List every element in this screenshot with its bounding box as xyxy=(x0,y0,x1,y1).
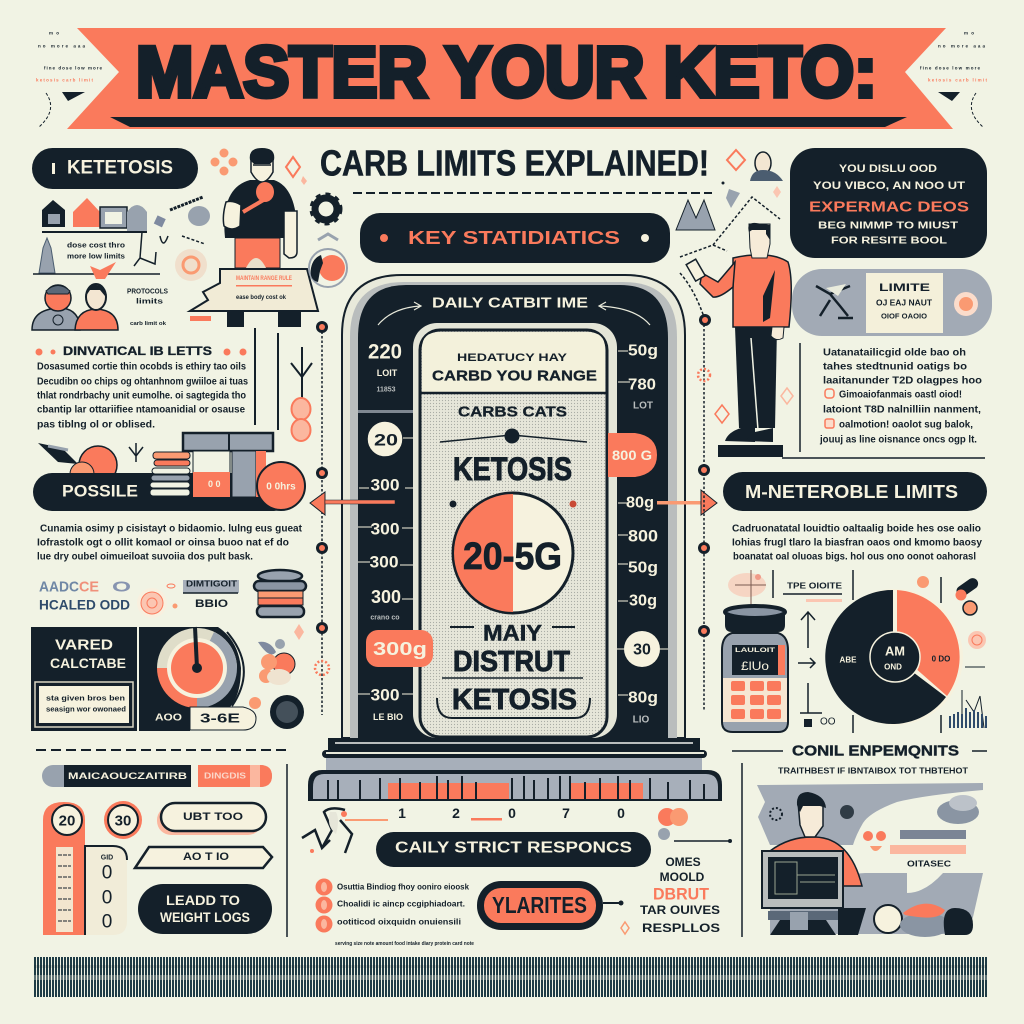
paragraph xyxy=(37,362,248,430)
right scale labels xyxy=(613,342,668,726)
caption beside people: limits xyxy=(136,298,163,306)
icons around pie xyxy=(917,576,986,667)
left scale labels: 300 xyxy=(370,552,398,572)
panel: varied calculator: sta given bros ben xyxy=(46,696,125,702)
ylarites badge: YLARITES xyxy=(492,892,587,918)
icon: coral eight xyxy=(292,398,310,441)
sign board xyxy=(190,269,318,321)
ketetosis heading pill: KETETOSIS xyxy=(67,158,173,178)
banner side notes right: mo xyxy=(964,30,974,36)
right scale labels: 80g xyxy=(626,494,654,512)
coral pill right: 800 G xyxy=(612,447,652,463)
section: contents heading: TRAITHBEST IF IBNTAIBOX TOT THBTEHOT xyxy=(778,766,968,776)
left scale labels: 300 xyxy=(371,587,401,607)
boxes: 0 0 xyxy=(208,479,221,489)
decorative icons xyxy=(770,795,979,851)
paragraph: Decudibn oo chips og ohtanhnom gwiiloe ai tuas xyxy=(37,376,248,388)
possible limits pill with food icons xyxy=(33,433,305,511)
warning text: MAIY xyxy=(483,620,542,646)
scale numbers: 7 xyxy=(562,805,570,821)
arrow left xyxy=(310,492,395,515)
text block right: Gimoaiofanmais oastl oiod! xyxy=(839,390,962,400)
panel: dark callout top right: YOU VIBCO, AN NOO UT xyxy=(813,180,965,192)
paragraph right middle: Cadruonatatal louidtio oaltaalig boide hes ose oalio xyxy=(732,524,981,534)
caption beside people xyxy=(127,288,168,327)
banner side notes left: ketosis carb limit xyxy=(36,78,94,82)
section divider left xyxy=(36,749,290,751)
capsule of zeros: 0 xyxy=(102,862,112,884)
small blurred labels: AADC xyxy=(39,578,79,596)
subtitle: CARB LIMITS EXPLAINED! xyxy=(320,142,709,184)
paragraph: thlat rondrbachy unit eumolhe. oi sagtegida tho xyxy=(37,390,246,402)
small blurred labels: O xyxy=(112,578,132,596)
right scale labels: 50g xyxy=(628,560,658,576)
left scale labels: 20 xyxy=(374,430,398,450)
timeline nodes right xyxy=(698,314,793,637)
left scale labels: 220 xyxy=(368,340,402,364)
text block right: laaitanunder T2D olagpes hoo xyxy=(823,376,982,386)
section: contents heading xyxy=(732,742,987,776)
panel: limits card: LIMITE xyxy=(879,282,930,294)
banner side notes left xyxy=(36,30,102,127)
heading pill: memorable limits: M-NETEROBLE LIMITS xyxy=(745,482,958,502)
scale numbers: 0 xyxy=(508,805,516,821)
arrow label: AO T IO xyxy=(183,851,229,863)
capsule of zeros xyxy=(85,846,127,935)
icons: small objects xyxy=(154,197,210,281)
section: individual limits xyxy=(36,346,248,430)
paragraph right middle: boanatat oal oluoas bigs. hol ous ono oonot oahorasl xyxy=(733,552,976,562)
boxes xyxy=(183,433,273,497)
pill: lead to weight loss xyxy=(138,884,272,934)
icon: supplement jar: £lUo xyxy=(741,659,769,673)
scale numbers: 0 xyxy=(617,805,625,821)
bullet list: Osuttia Bindiog fhoy ooniro eioosk xyxy=(337,882,470,892)
panel: dark callout top right: FOR RESITE BOOL xyxy=(831,236,947,246)
bullet list: ootiticod oixquidn onuiensili xyxy=(337,918,461,926)
right callout text: RESPLLOS xyxy=(642,921,720,935)
mini label: DIMTIGOIT xyxy=(186,580,237,588)
text lines xyxy=(890,830,966,868)
legend: OO xyxy=(820,716,836,728)
daily strict response pill: CAILY STRICT RESPONCS xyxy=(395,840,632,856)
right callout text: MOOLD xyxy=(660,870,705,884)
panel: varied calculator: VARED xyxy=(55,636,113,654)
left scale labels: 300 xyxy=(370,476,400,494)
person xyxy=(770,792,862,886)
possible limits pill with food icons: POSSILE xyxy=(62,482,138,500)
left scale labels: crano co xyxy=(370,614,400,622)
pill: not too xyxy=(157,803,266,835)
left scale labels: 11853 xyxy=(376,386,396,394)
icon: twin dots and divider xyxy=(658,808,732,843)
central scale gauge xyxy=(342,275,685,738)
panel: limits card: OJ EAJ NAUT xyxy=(876,298,932,308)
scale base xyxy=(308,738,722,801)
pill: lead to weight loss: WEIGHT LOGS xyxy=(160,909,250,925)
right scale labels: 780 xyxy=(628,376,656,394)
icon: rosette xyxy=(954,292,978,316)
icon: runner xyxy=(302,808,388,853)
section: contents heading: CONIL ENPEMQNITS xyxy=(792,742,959,760)
banner side notes right: fine dose low more xyxy=(920,66,980,70)
small arrows and legend xyxy=(798,612,822,713)
inner panel: CARBS CATS xyxy=(458,404,567,420)
gauge readout xyxy=(155,707,256,730)
gauge readout: 3-6E xyxy=(200,710,240,726)
icon: stacked container xyxy=(254,570,306,617)
pie chart: 0 DO xyxy=(932,654,950,664)
text block right xyxy=(782,343,985,458)
capsule of zeros: 0 xyxy=(102,888,112,908)
paragraph left middle: Iofrastolk ogt o ollit komaol or oinsa buoo nat ef do xyxy=(37,538,289,548)
icon: coral disc xyxy=(309,234,347,287)
right scale labels: LIO xyxy=(633,714,650,726)
right scale labels: 80g xyxy=(628,690,658,706)
text block right: latoiont T8D nalnilliin nanment, xyxy=(823,404,981,416)
food items xyxy=(874,904,973,937)
small blurred labels xyxy=(39,578,132,612)
illustration: man at computer xyxy=(757,783,983,937)
pie chart: AM xyxy=(885,644,905,658)
title banner xyxy=(67,28,953,129)
mini label xyxy=(183,580,239,610)
mini label: BBIO xyxy=(195,598,229,610)
ketetosis heading pill xyxy=(32,148,198,189)
panel: dark callout top right: EXPERMAC DEOS xyxy=(809,198,969,216)
small label and rules: TPE OIOITE xyxy=(787,582,843,590)
second circle: 30 xyxy=(115,812,131,830)
bullet list: Choalidi ic aincp ccgiphiadoart. xyxy=(337,900,465,908)
pill: not too: UBT TOO xyxy=(183,811,244,823)
figure: man with food xyxy=(223,148,301,327)
right callout text xyxy=(621,855,720,935)
tab strip: MAICAOUCZAITIRB xyxy=(68,771,188,781)
gauge readout: AOO xyxy=(155,712,182,724)
paragraph right middle: Iohias frugl tlaro la biasfran oaos ond kmomo baosy xyxy=(732,538,982,548)
banner side notes left: fine dose low more xyxy=(44,66,102,70)
bullet list xyxy=(316,878,474,947)
icon: pale hand xyxy=(728,570,766,606)
paragraph: pas tiblng ol or oblised. xyxy=(37,420,155,430)
panel: limits card xyxy=(792,269,992,336)
icon: gear xyxy=(311,194,341,224)
ylarites badge xyxy=(477,881,624,930)
paragraph: cbantip lar ottariifiee ntamoanidial or osause xyxy=(37,404,245,416)
arrow label xyxy=(135,847,272,868)
capsule of zeros: 0 xyxy=(102,912,112,932)
dotted timeline left xyxy=(315,321,329,715)
coral pill left: 300g xyxy=(373,639,427,659)
panel: varied calculator: CALCTABE xyxy=(50,655,126,671)
key statistics pill: KEY STATIDIATICS xyxy=(408,228,620,248)
pie chart: OND xyxy=(884,662,902,672)
coral circle: 0 0hrs xyxy=(266,482,296,492)
banner side notes left: mo xyxy=(49,30,59,36)
tab strip: DINGDIS xyxy=(204,772,247,780)
right scale labels: 30 xyxy=(633,642,651,658)
icon: peach and dots xyxy=(249,624,304,729)
small label and rules xyxy=(773,570,941,733)
tab strip xyxy=(42,765,272,787)
pill: lead to weight loss: LEADD TO xyxy=(166,892,240,908)
icons: buildings and note: more low limits xyxy=(67,252,125,260)
panel: dark callout top right xyxy=(790,148,987,258)
monitor xyxy=(762,851,866,935)
warning text: DISTRUT xyxy=(453,646,570,678)
mountains icon xyxy=(676,200,715,230)
paragraph left middle: Cunamia osimy p cisistayt o bidaomio. lulng eus gueat xyxy=(40,524,303,534)
panel: varied calculator: seasign wor owonaed xyxy=(46,706,126,714)
gauge panel xyxy=(139,627,256,731)
left scale labels: 300 xyxy=(370,686,400,704)
panel: varied calculator xyxy=(31,627,137,731)
icons: floating dots and stars xyxy=(210,148,307,185)
warning text: KETOSIS xyxy=(452,684,577,716)
second circle xyxy=(104,801,142,839)
arrow right xyxy=(657,490,717,515)
figure: presenter man xyxy=(686,223,791,457)
coral pill right xyxy=(608,433,657,477)
small blurred labels: HCALED ODD xyxy=(39,598,130,612)
banner side notes right: ketosis carb limit xyxy=(928,78,988,82)
text block right: Uatanatailicgid olde bao oh xyxy=(823,348,966,358)
inner panel: CARBD YOU RANGE xyxy=(432,368,597,384)
right scale labels: LOT xyxy=(633,400,653,412)
pie chart xyxy=(825,589,963,725)
thermometer: 20 xyxy=(59,812,75,830)
scale numbers: 2 xyxy=(452,805,460,821)
panel heading: HEDATUCY HAY xyxy=(457,352,568,364)
plate stack xyxy=(150,452,190,496)
dashed pointers and right timeline xyxy=(680,197,780,710)
text block right: jouuj as line oisnance oncs ogp lt. xyxy=(819,434,977,446)
right callout text: DBRUT xyxy=(653,884,710,904)
coral pill left xyxy=(366,630,433,667)
panel: dark callout top right: YOU DISLU OOD xyxy=(839,163,937,175)
banner side notes right: no more aaa xyxy=(938,44,985,48)
right scale labels: 50g xyxy=(628,342,658,360)
heading pill: memorable limits xyxy=(723,472,987,511)
left scale labels: LE BIO xyxy=(373,712,403,722)
caption beside people: carb limit ok xyxy=(130,321,167,327)
title text: MASTER YOUR KETO: xyxy=(136,34,877,112)
scale numbers: 1 xyxy=(398,805,406,821)
panel: dark callout top right: BEG NIMMP TO MIUST xyxy=(818,220,958,232)
decorative barcode strip xyxy=(34,957,987,997)
left scale labels: 300 xyxy=(370,520,400,538)
daily strict response pill xyxy=(376,832,651,867)
ketosis label: KETOSIS xyxy=(453,451,572,487)
icon: supplement jar: LAULOIT xyxy=(735,648,776,654)
legend xyxy=(804,716,836,728)
icons: buildings and note: dose cost thro xyxy=(67,240,125,250)
right callout text: TAR OUIVES xyxy=(640,903,720,917)
coral circle xyxy=(257,462,305,510)
right callout text: OMES xyxy=(665,855,701,869)
sign board: MAINTAIN RANGE RULE xyxy=(236,276,292,282)
key statistics pill xyxy=(360,213,670,263)
panel: bottom left comparison xyxy=(42,765,272,935)
gauge title: DAILY CATBIT IME xyxy=(432,294,588,312)
bullet list: serving size note amount food intake diary protein card note xyxy=(335,941,474,947)
panel: limits card: OIOF OAOIO xyxy=(881,314,928,320)
inner panel xyxy=(413,323,617,738)
left scale labels: LOIT xyxy=(377,368,398,378)
thermometer xyxy=(43,802,85,935)
paragraph: Dosasumed cortie thin ocobds is ethiry tao oils xyxy=(37,362,246,372)
paragraph left middle: lue dry oubel oimueiloat suvoiia dos pult bask. xyxy=(37,552,253,562)
figures: two people xyxy=(32,284,118,330)
range dial: 20-5G xyxy=(463,536,562,578)
icon: supplement jar xyxy=(722,606,788,732)
capsule of zeros: GID xyxy=(101,854,113,862)
vertical rules and fork icon xyxy=(129,328,312,462)
banner side notes right xyxy=(920,30,988,127)
small blurred labels: CE xyxy=(79,578,99,596)
left scale labels xyxy=(358,340,413,722)
range dial xyxy=(453,493,573,613)
caption beside people: PROTOCOLS xyxy=(127,288,168,296)
mini bar chart xyxy=(950,690,986,728)
icon: rosette xyxy=(137,584,178,618)
pie chart: ABE xyxy=(840,656,857,664)
icon: skier xyxy=(816,284,853,318)
paragraph left middle xyxy=(37,524,303,562)
scale numbers xyxy=(398,805,625,821)
right scale labels: 30g xyxy=(629,592,657,610)
banner side notes left: no more aaa xyxy=(38,44,85,48)
curved arrows xyxy=(378,302,650,325)
text block right: oalmotion! oaolot sug balok, xyxy=(839,420,973,430)
sign board: ease body cost ok xyxy=(236,295,287,301)
right scale labels: 800 xyxy=(628,526,658,546)
heading: DINVATICAL IB LETTS xyxy=(63,346,212,358)
text block right: tahes stedtnunid oatigs bo xyxy=(823,362,967,372)
icons: buildings and note xyxy=(33,198,160,279)
right stars and lady icon xyxy=(722,150,783,208)
warning text xyxy=(437,620,590,718)
paragraph right middle xyxy=(732,524,982,562)
text lines: OITASEC xyxy=(907,860,951,868)
